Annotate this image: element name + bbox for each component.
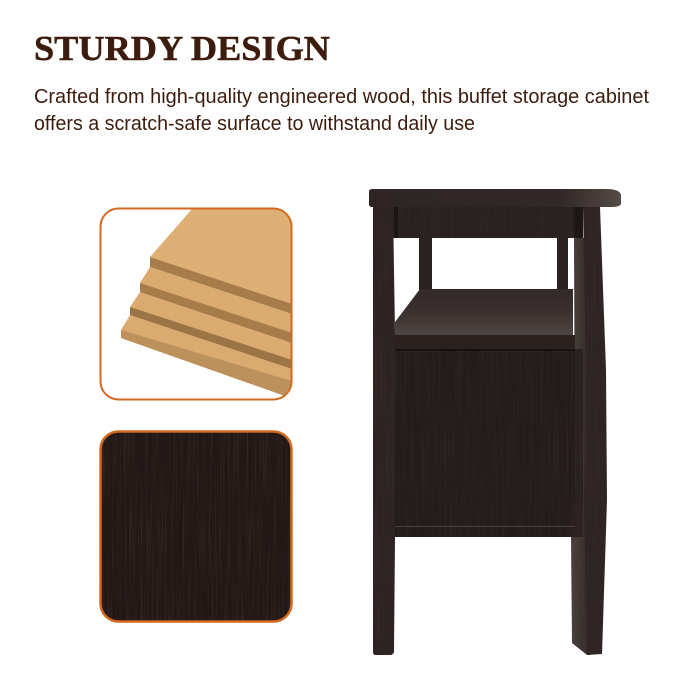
left leg	[373, 207, 395, 655]
tabletop	[369, 189, 621, 207]
shelf surface	[395, 289, 573, 335]
description text	[34, 86, 649, 135]
shelf front	[395, 335, 575, 349]
board 2	[140, 267, 292, 343]
title: STURDY DESIGN	[34, 29, 330, 68]
wood grain	[376, 211, 598, 578]
panel: engineered wood boards	[100, 208, 292, 400]
description text: offers a scratch-safe surface to withstand daily use	[34, 113, 475, 135]
right leg	[583, 207, 607, 655]
description text: Crafted from high-quality engineered wood, this buffet storage cabinet	[34, 86, 649, 108]
panel: dark wood surface	[100, 432, 292, 622]
back legs	[419, 238, 568, 290]
right inner leg face	[571, 238, 592, 655]
board 1	[150, 209, 292, 314]
cabinet side view	[369, 189, 621, 659]
cabinet door	[395, 349, 575, 537]
board 4	[121, 315, 292, 396]
board 3	[130, 292, 292, 369]
apron	[393, 207, 583, 238]
